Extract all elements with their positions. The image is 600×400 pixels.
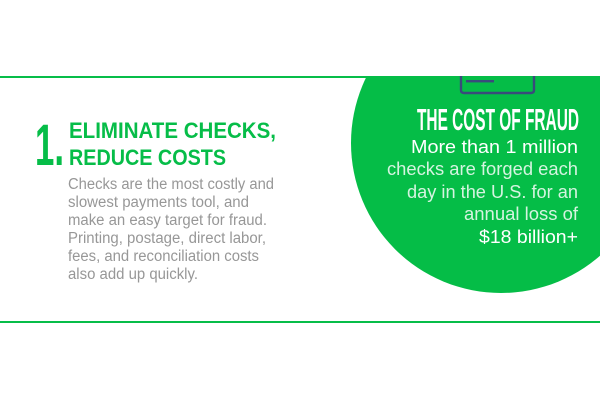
- fraud statistic text: annual loss of: [464, 204, 579, 224]
- bottom divider line: [0, 321, 600, 323]
- heading: eliminate checks, reduce costs: ELIMINATE CHECKS,: [69, 118, 276, 143]
- panel: cost of fraud circle: [351, 76, 600, 293]
- fraud statistic text: $18 billion+: [479, 227, 578, 247]
- body text: Printing, postage, direct labor,: [68, 230, 266, 247]
- fraud statistic text: More than 1 million: [411, 137, 578, 157]
- body text: also add up quickly.: [68, 266, 198, 283]
- body text: make an easy target for fraud.: [68, 212, 267, 229]
- step number: 1.: [35, 113, 64, 178]
- panel: eliminate checks: [35, 113, 276, 283]
- fraud statistic text: [387, 137, 579, 247]
- body text: Checks are the most costly and: [68, 176, 274, 193]
- fraud statistic text: day in the U.S. for an: [407, 182, 578, 202]
- top divider line: [0, 76, 600, 78]
- green circle: [351, 78, 600, 293]
- fraud statistic text: checks are forged each: [387, 159, 578, 179]
- body text: slowest payments tool, and: [68, 194, 249, 211]
- infographic canvas: [0, 76, 600, 323]
- body text: [68, 176, 274, 283]
- heading: eliminate checks, reduce costs: [69, 118, 276, 170]
- icon: cropped check outline: [461, 76, 534, 93]
- body text: fees, and reconciliation costs: [68, 248, 259, 265]
- heading: eliminate checks, reduce costs: REDUCE COSTS: [69, 145, 226, 170]
